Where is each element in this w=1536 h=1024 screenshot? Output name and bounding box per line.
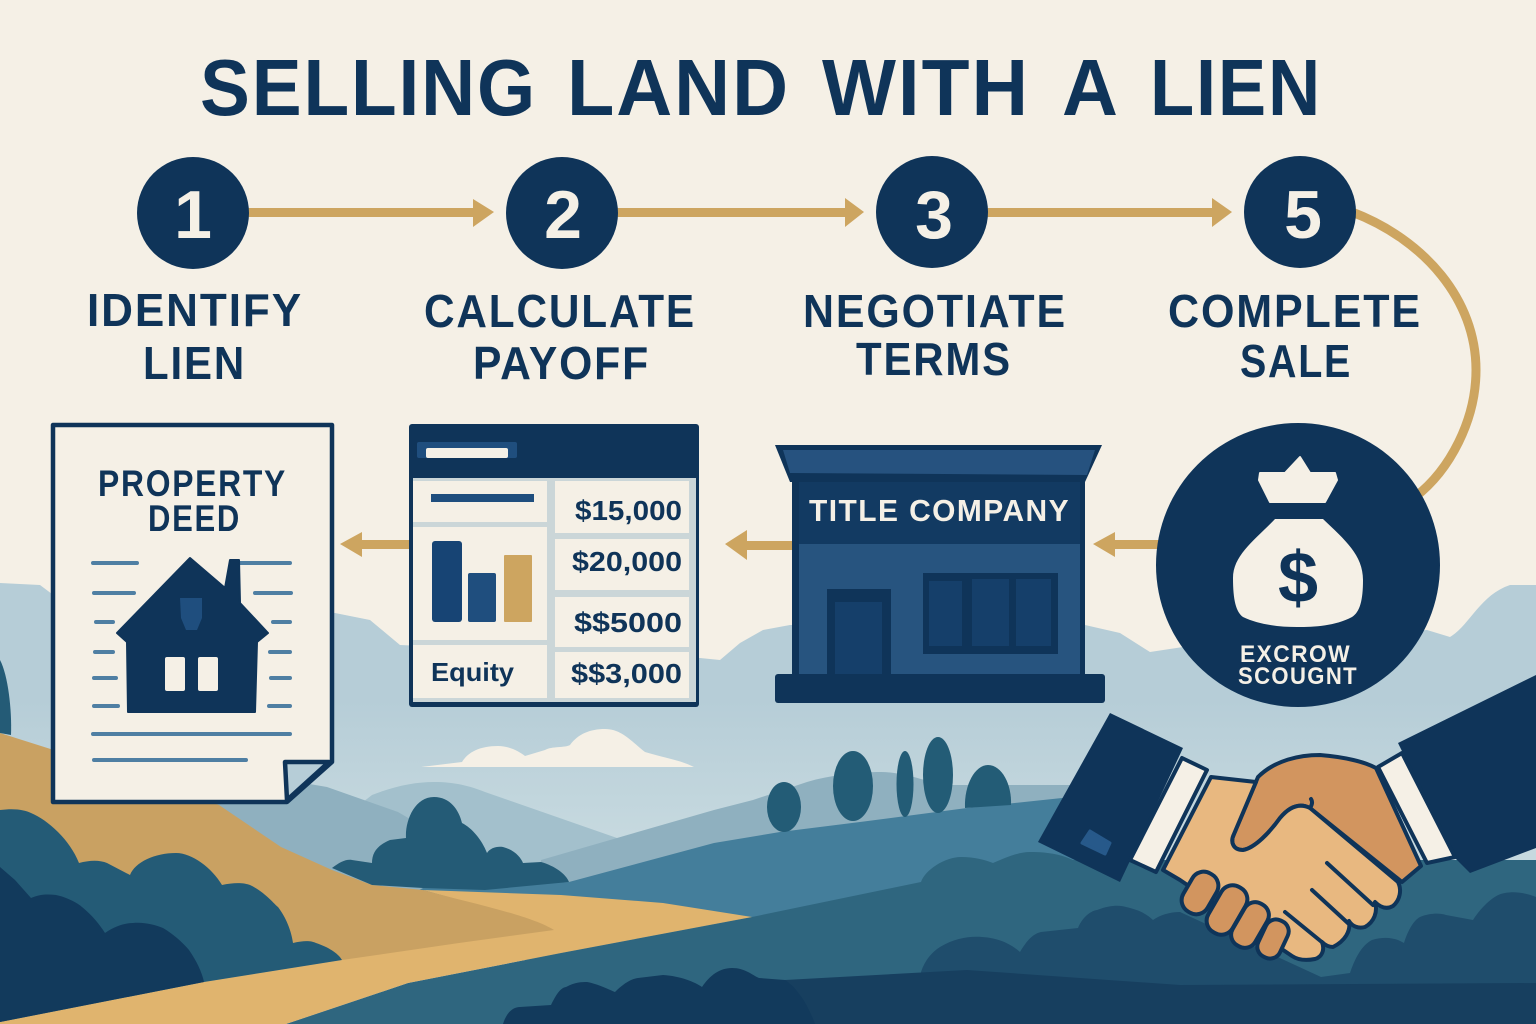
arrow: step 1 to 2 — [245, 199, 494, 227]
left bushes — [0, 809, 342, 1022]
step 1 — [87, 157, 303, 389]
title: SELLING — [200, 43, 537, 132]
cloud — [421, 729, 694, 767]
building sign: TITLE COMPANY — [809, 493, 1070, 528]
far hills — [340, 782, 617, 880]
door — [827, 589, 891, 675]
step 3: NEGOTIATE — [803, 285, 1067, 337]
gold hill — [0, 733, 554, 1022]
step 5: COMPLETE — [1168, 285, 1422, 337]
arrow: curve from step 5 to escrow — [1352, 212, 1476, 497]
deed text lines — [93, 563, 291, 760]
building wall — [792, 478, 1085, 676]
step 3 — [803, 156, 1067, 385]
back hand — [1232, 755, 1421, 882]
step 2: 2 — [544, 177, 582, 253]
arrow: step 2 to 3 — [615, 198, 864, 227]
step 3: TERMS — [856, 333, 1012, 385]
right cuff — [1378, 753, 1455, 863]
title: A — [1062, 43, 1117, 132]
near hill — [286, 852, 1536, 1024]
deed page fold — [285, 762, 329, 800]
window — [923, 573, 1058, 654]
spreadsheet header — [417, 442, 517, 458]
icon: money bag: $ — [1278, 538, 1318, 618]
step 2: PAYOFF — [473, 337, 650, 389]
title: WITH — [822, 43, 1030, 132]
left sleeve — [1038, 713, 1183, 882]
equity label: Equity — [431, 657, 515, 687]
finger lines — [1285, 799, 1373, 943]
panel: escrow account: SCOUGNT — [1238, 663, 1358, 690]
panel: escrow account — [1156, 423, 1440, 707]
left cuff — [1130, 758, 1207, 872]
step 1: LIEN — [143, 337, 246, 389]
building roof — [775, 445, 1102, 482]
payoff values: $$5000 — [574, 607, 682, 638]
arrow: escrow to title company — [1093, 532, 1160, 557]
spreadsheet cells — [413, 481, 689, 698]
step 5: SALE — [1240, 335, 1352, 387]
step 5 — [1168, 156, 1422, 387]
step 3: 3 — [915, 177, 953, 253]
step 2: CALCULATE — [424, 285, 696, 337]
icon: handshake — [1038, 675, 1536, 962]
right sleeve — [1398, 675, 1536, 873]
arrow: spreadsheet to deed — [340, 532, 410, 557]
payoff values: $$3,000 — [571, 658, 682, 689]
front hand — [1163, 777, 1400, 960]
title: LAND — [567, 43, 790, 132]
dark shrubs — [921, 892, 1536, 1024]
step 1: 1 — [174, 177, 212, 253]
center bush — [332, 797, 569, 890]
icon: money bag — [1233, 457, 1363, 627]
panel: payoff spreadsheet — [409, 424, 699, 707]
step 2 — [424, 157, 696, 389]
escrow label: EXCROW — [1240, 641, 1351, 668]
fingers — [1177, 867, 1292, 962]
step 1: IDENTIFY — [87, 284, 303, 336]
row of trees — [767, 737, 1011, 832]
panel: title company building — [775, 445, 1105, 703]
arrow: title company to spreadsheet — [725, 530, 794, 560]
payoff values — [571, 495, 682, 689]
payoff values: $20,000 — [572, 546, 682, 577]
title: LIEN — [1150, 43, 1322, 132]
mid hill — [400, 785, 1130, 960]
icon: house — [117, 558, 268, 712]
panel: property deed: DEED — [148, 498, 241, 539]
bottom bush — [503, 968, 815, 1024]
building base — [775, 674, 1105, 703]
landscape background — [0, 583, 1536, 1024]
deed heading: PROPERTY — [98, 463, 287, 504]
payoff values: $15,000 — [575, 495, 682, 526]
winding road — [0, 890, 752, 1024]
arrow: step 3 to 5 — [985, 198, 1232, 227]
bar chart — [432, 541, 532, 622]
panel: property deed — [53, 425, 332, 802]
step 5: 5 — [1284, 177, 1322, 253]
